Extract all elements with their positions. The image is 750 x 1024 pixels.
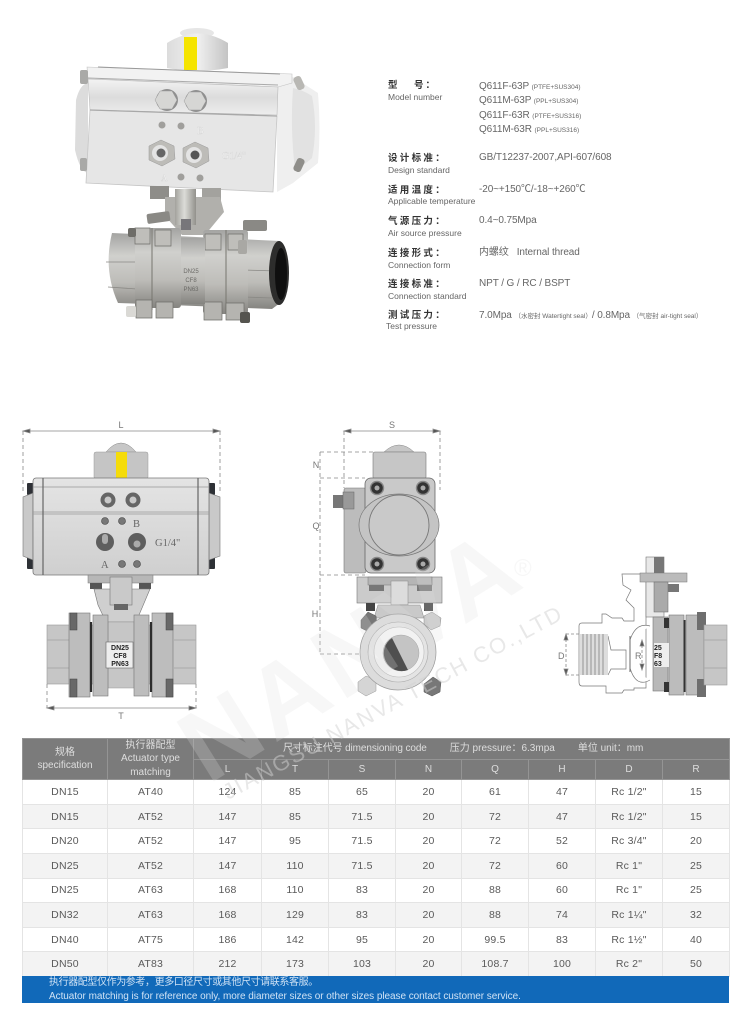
dimension table: Rc 1½"	[611, 934, 647, 946]
side view drawing	[312, 420, 442, 696]
dimensions D and R	[558, 634, 644, 675]
dimension lines S N Q H: N	[313, 460, 319, 470]
dimension table: 20	[422, 786, 435, 798]
dimension table: 88	[489, 884, 501, 896]
dimension table: 74	[556, 909, 568, 921]
dimension table: 20	[422, 909, 435, 921]
dimension table: 尺寸标注代号 dimensioning code 压力 pressure：6.3mpa 单位 unit：mm	[283, 743, 643, 754]
dimension table: AT83	[138, 958, 163, 970]
dimension table: DN50	[51, 958, 79, 970]
spec: connection form	[388, 246, 580, 270]
dimension table: 103	[353, 958, 371, 970]
footer note: 执行器配型仅作为参考，更多口径尺寸或其他尺寸请联系客服。	[49, 977, 318, 988]
dimension table: 25	[690, 860, 702, 872]
dimension table: 147	[218, 811, 237, 823]
actuator end view	[333, 445, 439, 573]
spec: connection standard	[388, 278, 570, 301]
spec: test pressure: 测试压力：	[388, 310, 447, 321]
footer note: Actuator matching is for reference only, more diameter sizes or other sizes please contact customer service.	[49, 991, 521, 1002]
dimension table: N	[425, 764, 432, 775]
dimension table: 71.5	[351, 811, 373, 823]
dimension table: 40	[690, 934, 702, 946]
body marking: CF8	[185, 278, 197, 284]
dimension table: 83	[556, 934, 568, 946]
spec: model number	[388, 80, 581, 135]
section marking: F8	[654, 653, 662, 660]
actuator housing: B	[133, 519, 140, 530]
dimension L: L	[118, 420, 124, 430]
section view drawing	[558, 557, 727, 697]
dimension table: 72	[489, 860, 501, 872]
dimension table: 110	[286, 884, 304, 896]
dimension table: 52	[556, 835, 568, 847]
spec: design standard: Design standard	[388, 165, 450, 175]
dimension table: T	[292, 764, 298, 775]
dimension table: AT75	[138, 934, 163, 946]
dimension table: AT52	[138, 811, 163, 823]
spec: model number: Model number	[388, 92, 442, 102]
dimension table: 72	[489, 835, 501, 847]
spec: test pressure	[386, 310, 702, 331]
spec list: Q611M-63R (PPL+SUS316)	[479, 124, 579, 135]
spec: test pressure: Test pressure	[386, 321, 437, 331]
dimension table: 124	[218, 786, 237, 798]
valve body	[47, 613, 196, 697]
dimension table: 规格	[55, 747, 75, 758]
mounting bracket and stem	[150, 186, 224, 235]
dimension table: 168	[218, 909, 237, 921]
spec: design standard: GB/T12237-2007,API-607/608	[479, 152, 612, 163]
dimension table: 99.5	[484, 934, 506, 946]
dimension table: AT63	[138, 884, 163, 896]
dimension table: 95	[289, 835, 301, 847]
dimension table: DN20	[51, 835, 79, 847]
air fittings	[149, 140, 209, 168]
small holes	[158, 122, 204, 182]
spec: applicable temperature: 适用温度：	[388, 185, 447, 196]
spec: air source pressure	[388, 215, 537, 238]
dimension table: 15	[690, 786, 702, 798]
dimension table: DN15	[51, 811, 79, 823]
dimension table: 147	[218, 860, 237, 872]
dimension table: DN25	[51, 860, 79, 872]
dimension table: AT52	[138, 860, 163, 872]
spec: connection form: 内螺纹 Internal thread	[479, 247, 580, 258]
dimension table: Rc 1"	[616, 860, 642, 872]
dimension table: L	[225, 764, 230, 775]
dimension table: Rc 1¼"	[611, 909, 647, 921]
dimension table: 20	[422, 958, 435, 970]
spec: connection form: Connection form	[388, 260, 450, 270]
dimension lines S N Q H	[312, 420, 440, 654]
dimension table: AT63	[138, 909, 163, 921]
dimension table: Actuator type	[121, 753, 180, 764]
dimension table: 83	[356, 884, 368, 896]
dimension table: 147	[218, 835, 237, 847]
dimension table	[22, 738, 730, 977]
dimension table: DN40	[51, 934, 79, 946]
dimension table: S	[359, 764, 365, 775]
dimension table: 60	[556, 884, 568, 896]
dimension table: 20	[422, 835, 435, 847]
body marking label: DN25	[111, 645, 129, 652]
dimension table: H	[558, 764, 566, 775]
dimension table: 71.5	[351, 860, 373, 872]
spec: air source pressure: Air source pressure	[388, 228, 462, 238]
spec: connection form: 连接形式：	[388, 248, 447, 259]
embossed port labels: B	[197, 126, 204, 137]
stem bracket	[88, 575, 153, 622]
dimension table: Rc 1/2"	[611, 811, 647, 823]
spec: air source pressure: 气源压力：	[388, 216, 447, 227]
dimension lines S N Q H: Q	[312, 521, 320, 531]
embossed port labels: G1/4"	[222, 151, 246, 162]
dimension table: 47	[556, 811, 568, 823]
spec: design standard	[388, 152, 612, 175]
dimension table: 83	[356, 909, 368, 921]
dimension table: 129	[286, 909, 304, 921]
dimension table: 108.7	[481, 958, 509, 970]
embossed port labels: A	[161, 173, 168, 183]
dimension table: 60	[556, 860, 568, 872]
spec: model number: Q611M-63P (PPL+SUS304)	[479, 95, 578, 106]
dimension table: 15	[690, 811, 702, 823]
thread	[580, 634, 608, 675]
dimension T	[47, 684, 196, 721]
sectioned right half	[640, 557, 727, 697]
dimension table: Rc 3/4"	[611, 835, 647, 847]
front view drawing	[23, 420, 220, 721]
body marking: DN25	[183, 269, 199, 275]
spec: applicable temperature	[388, 184, 586, 206]
section marking: 63	[654, 661, 662, 668]
dimension table: 72	[489, 811, 501, 823]
body marking label: PN63	[111, 661, 129, 668]
sectioned left half	[579, 574, 650, 693]
actuator cap	[94, 443, 148, 479]
dimension table: 65	[356, 786, 368, 798]
dimension table: 47	[556, 786, 568, 798]
dimension table: 88	[489, 909, 501, 921]
valve end view	[358, 612, 441, 696]
spec: model number: Q611F-63R (PTFE+SUS316)	[479, 110, 581, 121]
dimension table: 20	[422, 811, 435, 823]
dimension table: 85	[289, 786, 301, 798]
spec: test pressure: 7.0Mpa （水密封 Watertight seal）/ 0.8Mpa （气密封 air-tight seal）	[479, 310, 702, 321]
actuator housing: G1/4"	[155, 538, 180, 549]
dimension lines S N Q H: H	[312, 609, 318, 619]
dimension table: 186	[218, 934, 237, 946]
spec: connection standard: NPT / G / RC / BSPT	[479, 278, 570, 289]
actuator housing	[23, 478, 220, 575]
dimension table: Q	[491, 764, 499, 775]
embossed port labels	[161, 126, 246, 183]
dimension table: 20	[422, 860, 435, 872]
ball valve body	[106, 211, 289, 323]
dimension table: DN32	[51, 909, 79, 921]
dimension table: 85	[289, 811, 301, 823]
spec: connection standard: 连接标准：	[388, 279, 447, 290]
dimension table: 执行器配型	[126, 740, 176, 751]
dimension table: DN25	[51, 884, 79, 896]
section marking	[654, 643, 669, 668]
dimension table: 173	[286, 958, 304, 970]
footer note	[22, 976, 729, 1003]
dimension table: 25	[690, 884, 702, 896]
body marking label: CF8	[113, 653, 127, 660]
dimension table: 20	[690, 835, 702, 847]
dimension lines S N Q H: S	[389, 420, 395, 430]
dimension table: AT52	[138, 835, 163, 847]
dimension table: DN15	[51, 786, 79, 798]
spec: design standard: 设计标准：	[388, 153, 447, 164]
spec: applicable temperature: Applicable temperature	[388, 196, 475, 206]
actuator cap with yellow stripe	[167, 28, 228, 71]
hex bolts	[155, 89, 207, 112]
dimension table: 71.5	[351, 835, 373, 847]
dimension L	[23, 420, 220, 492]
spec: connection standard: Connection standard	[388, 291, 466, 301]
dimension table: 20	[422, 884, 435, 896]
dimensions D and R: D	[558, 651, 565, 661]
watermark: ®	[514, 555, 532, 582]
dimension table: 20	[422, 934, 435, 946]
dimension table: 61	[489, 786, 501, 798]
dimension table: 142	[286, 934, 304, 946]
dimension table: 168	[218, 884, 237, 896]
spec: model number: 号：	[414, 80, 437, 91]
dimension table: D	[625, 764, 633, 775]
dimension table: specification	[37, 760, 93, 771]
actuator housing: A	[101, 560, 109, 571]
dimension T: T	[118, 711, 124, 721]
dimension table: 95	[356, 934, 368, 946]
product photo: pneumatic ball valve	[75, 28, 320, 323]
dimensions D and R: R	[635, 651, 642, 661]
dimension table: 32	[690, 909, 702, 921]
spec: model number: 型	[388, 80, 398, 91]
bracket	[357, 577, 442, 618]
actuator body	[75, 67, 320, 192]
dimension table: AT40	[138, 786, 163, 798]
spec: model number: Q611F-63P (PTFE+SUS304)	[479, 81, 581, 92]
dimension table: Rc 1"	[616, 884, 642, 896]
dimension table: Rc 1/2"	[611, 786, 647, 798]
watermark: NANVA	[159, 508, 538, 804]
body marking: PN63	[183, 287, 199, 293]
watermark: JIANGSU NANVA TECH CO.,LTD	[218, 600, 568, 804]
spec list	[386, 80, 702, 331]
dimension table: 110	[286, 860, 304, 872]
dimension table: R	[692, 764, 700, 775]
section marking: 25	[654, 645, 662, 652]
dimension table: matching	[130, 767, 171, 778]
body marking label	[106, 642, 133, 668]
dimension table: Rc 2"	[616, 958, 642, 970]
dimension table: 212	[218, 958, 237, 970]
spec: applicable temperature: -20~+150℃/-18~+260℃	[479, 184, 586, 195]
spec: air source pressure: 0.4~0.75Mpa	[479, 215, 537, 226]
dimension table: 100	[553, 958, 571, 970]
dimension table: 50	[690, 958, 702, 970]
